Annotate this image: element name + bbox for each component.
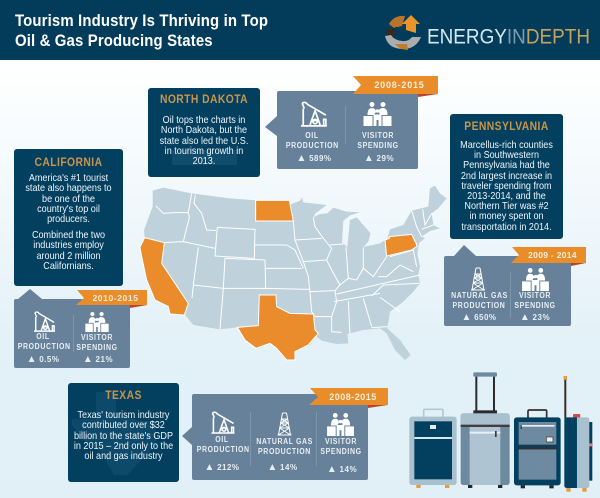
panel: North Dakota [148, 88, 260, 177]
icon: tower, Pennsylvania [471, 268, 485, 290]
icon: oil pump, Texas [212, 412, 234, 433]
labels: Texas oil: OIL [215, 435, 229, 444]
ribbon label: California: 2010-2015 [92, 293, 139, 303]
text: Pennsylvania: transportation in 2014. [461, 222, 552, 233]
text: North Dakota: 2013. [193, 156, 215, 167]
text: Pennsylvania: 2013-2014, and the [467, 191, 546, 202]
logo mark [385, 15, 421, 50]
ribbon label: Texas: 2008-2015 [329, 392, 377, 402]
title: Oil & Gas Producing States [15, 31, 213, 50]
icon: family, Texas [327, 413, 354, 436]
text: California [25, 173, 112, 272]
labels: California oil: OIL [36, 332, 50, 341]
header band [0, 0, 600, 60]
text: California: America's #1 tourist [29, 173, 108, 184]
text: Texas: contributed over $32 [82, 420, 165, 431]
text: California: be one of the [42, 194, 95, 205]
card: Pennsylvania stats [444, 245, 571, 326]
value: Pennsylvania gas: ▲ 650% [461, 312, 497, 323]
text: California: producers. [47, 214, 90, 225]
text: Texas: oil and gas industry [84, 451, 163, 462]
value: Pennsylvania visitor: ▲ 23% [520, 312, 550, 323]
card: North Dakota stats [265, 91, 418, 169]
text: California: Californians. [43, 261, 94, 272]
panel: California [14, 149, 123, 286]
labels: Pennsylvania visitor [514, 291, 556, 310]
heading: California: CALIFORNIA [35, 155, 102, 169]
text: Pennsylvania: Northern Tier was #2 [464, 201, 549, 212]
text: California: industries employ [33, 240, 104, 251]
heading: North Dakota: NORTH DAKOTA [160, 92, 248, 106]
text: Texas: in 2015 – 2nd only to the [74, 441, 173, 452]
ribbon: North Dakota [418, 94, 438, 97]
labels: California visitor: VISITOR [81, 333, 113, 342]
ribbons [76, 76, 586, 408]
state: California [140, 238, 188, 315]
labels: Pennsylvania visitor: VISITOR [519, 291, 551, 300]
labels: Pennsylvania visitor: SPENDING [514, 301, 556, 310]
suitcase 4 [564, 376, 593, 492]
icon: tower, Texas [278, 413, 292, 435]
heading: Texas: TEXAS [105, 388, 142, 402]
labels: Texas oil [197, 435, 250, 454]
panel: Pennsylvania [450, 114, 563, 239]
labels: North Dakota oil: OIL [305, 131, 319, 140]
icon: oil pump, North Dakota [301, 102, 327, 126]
suitcase 2 [461, 372, 510, 488]
text: Pennsylvania: in Southwestern [474, 150, 539, 161]
labels: North Dakota oil [286, 131, 339, 150]
labels: North Dakota visitor: VISITOR [362, 131, 394, 140]
text: Pennsylvania: in money spent on [469, 211, 544, 222]
labels: California oil: PRODUCTION [18, 342, 71, 351]
state: Pennsylvania [385, 234, 417, 256]
value: Texas oil: ▲ 212% [204, 462, 240, 473]
suitcase 3 [514, 410, 561, 488]
ribbon: California [130, 305, 147, 308]
suitcase 1 [409, 409, 457, 488]
ribbon label: North Dakota: 2008-2015 [374, 80, 425, 90]
labels: Texas gas [256, 437, 313, 456]
logo wordmark: ENERGYINDEPTH [427, 26, 590, 48]
value: North Dakota visitor: ▲ 29% [364, 153, 394, 164]
labels: Texas oil: PRODUCTION [197, 445, 250, 454]
state: Texas [237, 295, 318, 360]
value: California visitor: ▲ 21% [83, 354, 113, 365]
labels: California oil [18, 332, 71, 351]
value: California oil: ▲ 0.5% [27, 354, 59, 365]
labels: Texas visitor: SPENDING [320, 447, 362, 456]
watermark: North Dakota shape [172, 150, 237, 165]
text: North Dakota: North Dakota, but the [161, 125, 247, 136]
labels: North Dakota oil: PRODUCTION [286, 141, 339, 150]
text: California: state also happens to [25, 183, 112, 194]
value: Texas visitor: ▲ 14% [327, 464, 357, 475]
icon: family, North Dakota [364, 102, 392, 126]
text: Texas: billion to the state's GDP [74, 431, 173, 442]
text: California: Combined the two [32, 230, 105, 241]
map of the United States [140, 186, 447, 360]
labels: Pennsylvania gas: NATURAL GAS [451, 291, 508, 300]
text: North Dakota: in tourism growth in [165, 146, 243, 157]
icon: oil pump, California [34, 312, 55, 331]
heading: Pennsylvania: PENNSYLVANIA [464, 119, 549, 133]
labels: North Dakota visitor: SPENDING [357, 141, 399, 150]
panel shapes: stat cards [14, 91, 571, 480]
ribbon: Pennsylvania [571, 263, 586, 266]
labels: Texas gas: PRODUCTION [258, 447, 311, 456]
text: Pennsylvania: Marcellus-rich counties [460, 140, 553, 151]
text: Pennsylvania: 2nd largest increase in [461, 171, 552, 182]
labels: California visitor [76, 333, 118, 352]
text: North Dakota: Oil tops the charts in [163, 115, 245, 126]
icon: family, Pennsylvania [522, 268, 549, 291]
ribbon label: Pennsylvania: 2009 - 2014 [528, 250, 577, 260]
luggage group [409, 372, 593, 492]
title [15, 11, 268, 50]
labels: Texas gas: NATURAL GAS [256, 437, 313, 446]
text: California: country's top oil [37, 204, 100, 215]
text: Texas: Texas' tourism industry [78, 410, 169, 421]
text: North Dakota [160, 115, 248, 167]
labels: North Dakota visitor [357, 131, 399, 150]
dividers [74, 106, 510, 466]
text: Pennsylvania: traveler spending from [461, 181, 552, 192]
title: Tourism Industry Is Thriving in Top [15, 11, 268, 30]
labels: Pennsylvania gas [451, 291, 508, 310]
ribbon: Texas [368, 405, 388, 408]
watermark: Texas shape [72, 392, 156, 475]
labels: Texas visitor: VISITOR [325, 437, 357, 446]
text: California: around 2 million [36, 251, 100, 262]
panel: Texas [68, 383, 179, 482]
text: North Dakota: state also led the U.S. [160, 136, 248, 147]
icon: family, California [85, 312, 109, 332]
text: Pennsylvania: Pennsylvania had the [463, 160, 550, 171]
text: Pennsylvania [460, 140, 553, 233]
card: Texas stats [182, 394, 368, 480]
labels: Pennsylvania gas: PRODUCTION [453, 301, 505, 310]
value: North Dakota oil: ▲ 589% [296, 153, 332, 164]
card: California stats [14, 289, 130, 368]
value: Texas gas: ▲ 14% [267, 462, 298, 473]
labels: California visitor: SPENDING [76, 343, 118, 352]
labels: Texas visitor [320, 437, 362, 456]
text: Texas [74, 410, 173, 462]
state: North Dakota [256, 200, 293, 221]
